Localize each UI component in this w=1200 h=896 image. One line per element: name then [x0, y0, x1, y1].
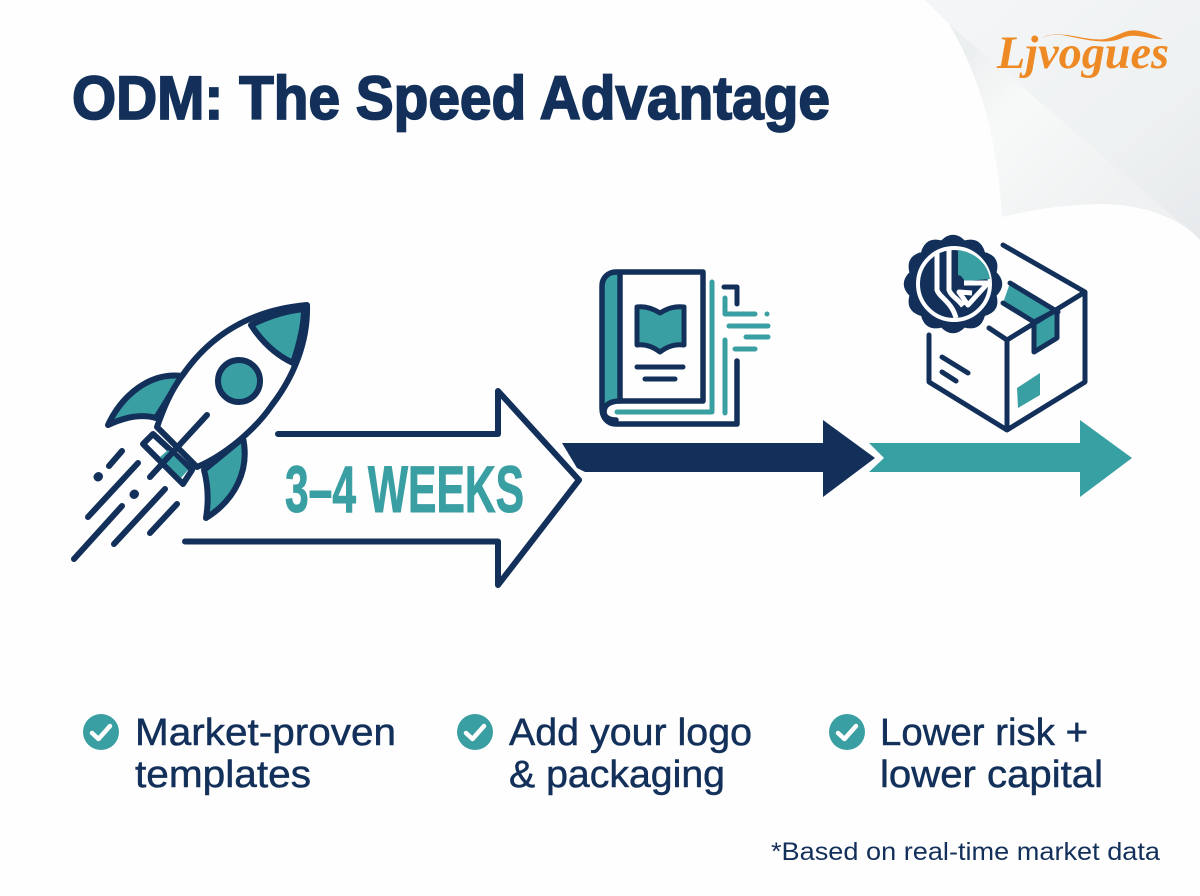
benefit: add your logo and packaging [457, 712, 752, 796]
benefit text: & packaging [509, 754, 725, 796]
benefit text: lower capital [880, 754, 1103, 796]
box body [929, 245, 1085, 430]
navy arrow [562, 420, 875, 497]
benefit text: Market-proven [135, 712, 396, 754]
teal arrow [869, 420, 1132, 497]
rocket nose cone [251, 309, 304, 363]
title: ODM: The Speed Advantage [72, 64, 830, 132]
book cover [602, 272, 737, 424]
check icon [83, 714, 119, 750]
box label lines [942, 357, 968, 381]
icon: logo seal badge [905, 236, 1001, 332]
rocket nozzle [143, 434, 192, 484]
benefit: market-proven templates [83, 712, 396, 796]
rocket body [157, 305, 307, 467]
benefit: lower risk and capital [829, 712, 1103, 796]
icon: rocket [74, 305, 307, 559]
box teal square [1017, 373, 1040, 408]
page curl corner [925, 0, 1200, 240]
benefit text: templates [135, 754, 311, 796]
book text lines [637, 367, 683, 379]
footnote: *Based on real-time market data [771, 838, 1160, 866]
arrow label: 3–4 weeks: 3–4 WEEKS [285, 452, 524, 526]
book page lines [617, 282, 725, 413]
speed lines [74, 451, 177, 559]
benefit text: Lower risk + [880, 712, 1088, 754]
check icon [457, 714, 493, 750]
rocket fins [108, 376, 245, 518]
logo: Ljvogues: Ljvogues [996, 27, 1169, 79]
book spine [604, 273, 620, 405]
book speed lines [725, 298, 768, 349]
icon: book [602, 272, 770, 424]
check icon [829, 714, 865, 750]
benefit text: Add your logo [509, 712, 752, 754]
box tape on side [1034, 310, 1057, 352]
icon: package box [929, 245, 1085, 430]
box tape on top [1003, 283, 1055, 322]
rocket window [218, 360, 260, 402]
book emblem [637, 307, 684, 352]
rocket centre line [150, 415, 207, 477]
speed dots [98, 476, 134, 494]
big outlined arrow [185, 391, 579, 585]
